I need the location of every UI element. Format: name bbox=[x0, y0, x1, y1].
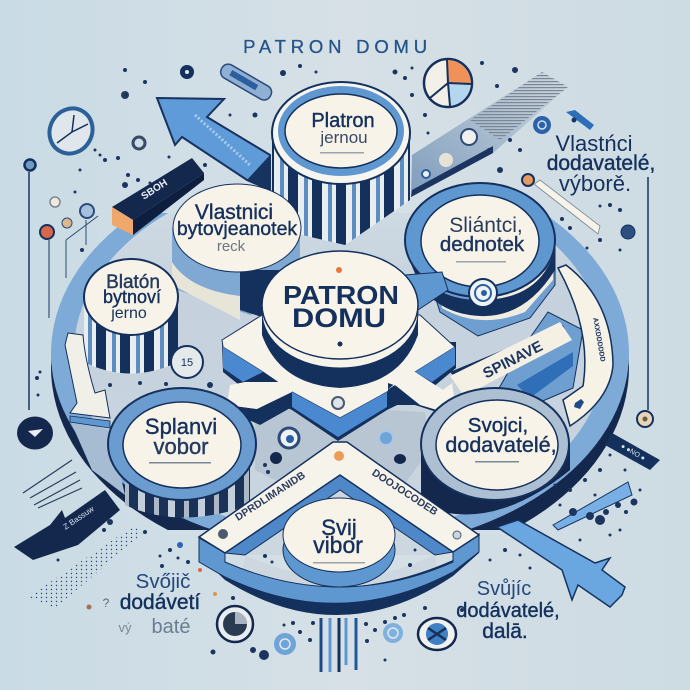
blue bar right bbox=[553, 482, 632, 530]
left-middle cylinder: Vlastnici bytovjeanotek bbox=[172, 184, 301, 320]
bottom-left cylinder: Splanvi vobor: vobor bbox=[153, 434, 209, 459]
central cylinder: PATRON DOMU bbox=[262, 251, 418, 388]
left cylinder: Blaton bytnovi jerno: jerno bbox=[110, 305, 147, 322]
bottom-right cylinder: Svojci dodavatele: Svojci, bbox=[468, 414, 528, 437]
icon: dark bubble left bbox=[17, 416, 53, 450]
vertical line right with marker bbox=[637, 177, 653, 427]
dark label bottom right bbox=[605, 433, 660, 470]
text: bottom-left list bbox=[103, 570, 200, 638]
central diamond platform bbox=[222, 315, 456, 441]
left-middle cylinder: Vlastnici bytovjeanotek: reck bbox=[217, 238, 246, 255]
small badge: 15 bbox=[181, 357, 193, 369]
left cream arrow bbox=[227, 382, 292, 425]
icon: clock left bbox=[41, 101, 101, 161]
outer ring bbox=[51, 213, 629, 530]
central cylinder: PATRON DOMU: PATRON bbox=[283, 280, 399, 310]
text: bottom-right list bbox=[456, 578, 560, 643]
icon: small capsule top bbox=[218, 62, 274, 103]
icon: pie chart top bbox=[424, 59, 472, 107]
dark label SBOH bbox=[112, 158, 204, 235]
curved cream arrow left bbox=[65, 333, 125, 495]
top cylinder: Platron jernou: jernou bbox=[319, 128, 368, 147]
left cylinder: Blaton bytnovi jerno: bytnoví bbox=[103, 287, 161, 307]
diagonal band top right bbox=[411, 72, 568, 197]
left-middle cylinder: Vlastnici bytovjeanotek: Vlastnici bbox=[195, 201, 273, 224]
central cylinder: PATRON DOMU: DOMU bbox=[292, 303, 386, 333]
text: right list: Vlastńci bbox=[555, 131, 633, 156]
text: bottom-right list: dalā. bbox=[482, 620, 528, 643]
curved cream arrow right bbox=[558, 265, 613, 426]
small badge bbox=[171, 346, 203, 378]
dotted band bottom left bbox=[28, 525, 142, 608]
dark arrow label bottom left: Z Bassuw bbox=[62, 504, 96, 531]
bottom-right cylinder: Svojci dodavatele bbox=[421, 388, 570, 514]
scattered dots bbox=[35, 61, 642, 662]
right cylinder: Sliantci dednotek bbox=[405, 183, 555, 336]
right cream arrow bbox=[387, 370, 457, 418]
icons: bottom circles bbox=[217, 606, 456, 655]
text: bottom-left list: dodávetí bbox=[120, 591, 200, 614]
lower gray panel under diamond bbox=[255, 410, 430, 490]
curved cream arrow right: AXXDDDDDD bbox=[591, 317, 606, 362]
title: PATRON DOMU bbox=[243, 36, 432, 57]
right cylinder: Sliantci dednotek: dednotek bbox=[440, 233, 525, 256]
text: bottom-right list: dodávatelé, bbox=[456, 600, 560, 622]
text: right list: výborě. bbox=[559, 171, 631, 196]
center cylinder: Svij vibor: Svij bbox=[321, 515, 357, 540]
text: bottom-left list: Svőjič bbox=[136, 570, 190, 593]
SPRAVE label block bbox=[450, 312, 583, 412]
icons: small left circles bbox=[40, 65, 406, 464]
text: bottom-left list: baté bbox=[152, 616, 190, 638]
triangle frame bbox=[199, 442, 479, 615]
dark label SBOH: SBOH bbox=[140, 177, 170, 202]
text: bottom-right list: Svůjíc bbox=[477, 578, 531, 600]
center cylinder: Svij vibor: vibor bbox=[313, 532, 363, 558]
bottom-right cylinder: Svojci dodavatele: dodavatelé, bbox=[445, 433, 557, 457]
left cylinder: Blaton bytnovi jerno: Blatón bbox=[106, 272, 160, 293]
lines block left bbox=[23, 460, 82, 508]
big blue arrow top left bbox=[157, 98, 270, 190]
right cylinder: Sliantci dednotek: Sliántci, bbox=[449, 214, 523, 237]
SPRAVE label block: SPINAVE bbox=[480, 338, 546, 382]
blue arrow bottom right bbox=[497, 520, 625, 607]
bottom-left cylinder: Splanvi vobor bbox=[108, 388, 256, 518]
triangle frame: DPRDLIMANIDB bbox=[233, 469, 308, 524]
text: bottom-left list: vý bbox=[118, 620, 132, 635]
left-middle cylinder: Vlastnici bytovjeanotek: bytovjeanotek bbox=[177, 218, 297, 240]
triangle frame: DOOJOCODEB bbox=[370, 467, 440, 518]
bottom vertical stripes bbox=[321, 618, 356, 672]
center cylinder: Svij vibor bbox=[283, 498, 395, 587]
vertical line left with marker bbox=[24, 160, 36, 410]
dark label bottom right: ● ●NO ● bbox=[619, 443, 646, 463]
text: right list bbox=[547, 131, 655, 196]
icons: small right circles bbox=[522, 110, 635, 239]
dark arrow label bottom left bbox=[14, 490, 120, 560]
left cylinder: Blaton bytnovi jerno bbox=[84, 259, 178, 374]
text: right list: dodavatelé, bbox=[547, 152, 655, 175]
top cylinder: Platron jernou: Platron bbox=[311, 110, 375, 132]
bottom-left cylinder: Splanvi vobor: Splanvi bbox=[145, 414, 217, 439]
top cylinder: Platron jernou bbox=[272, 82, 410, 245]
text: bottom-left list: ? bbox=[103, 596, 110, 610]
